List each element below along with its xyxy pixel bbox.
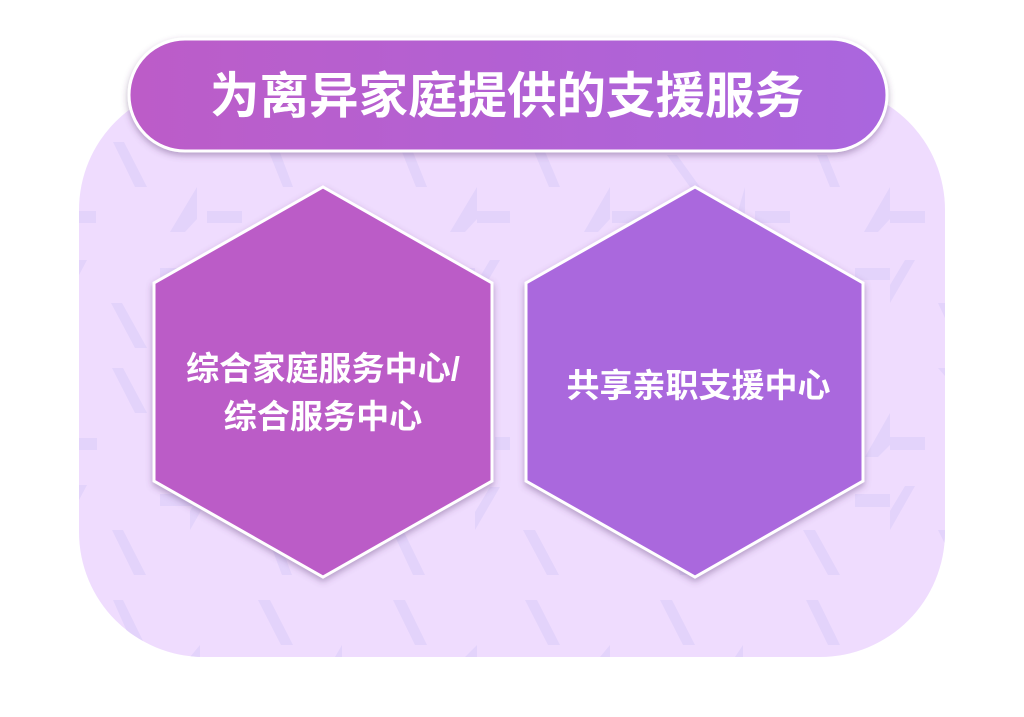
title banner <box>129 39 887 151</box>
panel: left hexagon <box>154 187 492 577</box>
panel: background <box>79 85 945 657</box>
panel: right hexagon <box>526 187 863 577</box>
text: co-parenting support centre: 共享亲职支援中心 <box>566 367 830 404</box>
title: 为离异家庭提供的支援服务 <box>210 69 804 124</box>
text: family service centre: 综合服务中心 <box>224 399 422 436</box>
text: family service centre: 综合家庭服务中心/ <box>186 351 460 388</box>
